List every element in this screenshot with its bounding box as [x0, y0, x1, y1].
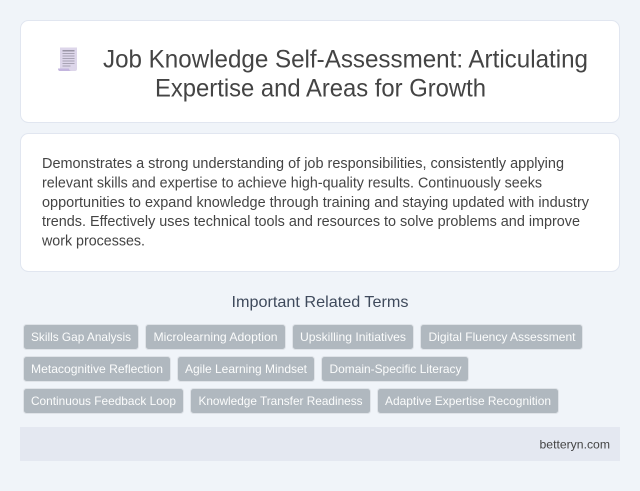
tag [378, 388, 558, 414]
icon: document scroll [58, 48, 77, 71]
tag: Domain-Specific Literacy [330, 362, 462, 376]
tag: Continuous Feedback Loop [31, 394, 176, 408]
panel: header card [20, 20, 620, 122]
tag: Skills Gap Analysis [31, 330, 131, 344]
tag [322, 356, 468, 382]
tag [178, 356, 314, 382]
tag [146, 324, 286, 350]
description text: trends. Effectively uses technical tools and resources to solve problems and improve [42, 214, 580, 230]
tag [24, 324, 138, 350]
description text: opportunities to expand knowledge through training and staying updated with industry [42, 195, 590, 211]
description text: Demonstrates a strong understanding of job responsibilities, consistently applying [42, 156, 564, 172]
tag: Metacognitive Reflection [31, 362, 163, 376]
title: Job Knowledge Self-Assessment: Articulating [103, 46, 588, 74]
panel: description card [20, 134, 620, 272]
description text: relevant skills and expertise to achieve high-quality results. Continuously seeks [42, 176, 542, 192]
tags: related terms [24, 324, 582, 414]
tag: Microlearning Adoption [154, 330, 278, 344]
footer bar [20, 427, 620, 461]
tag [24, 356, 170, 382]
tag: Agile Learning Mindset [185, 362, 308, 376]
tag [420, 324, 582, 350]
title: Expertise and Areas for Growth [155, 74, 486, 102]
description text: work processes. [41, 234, 145, 250]
tag [24, 388, 184, 414]
footer text: site name: betteryn.com [540, 438, 610, 452]
tag: Digital Fluency Assessment [428, 330, 576, 344]
tag: Upskilling Initiatives [300, 330, 406, 344]
tag: Knowledge Transfer Readiness [198, 394, 362, 408]
heading: important related terms: Important Related Terms [232, 294, 408, 311]
tag [292, 324, 414, 350]
tag [190, 388, 370, 414]
tag: Adaptive Expertise Recognition [385, 394, 551, 408]
